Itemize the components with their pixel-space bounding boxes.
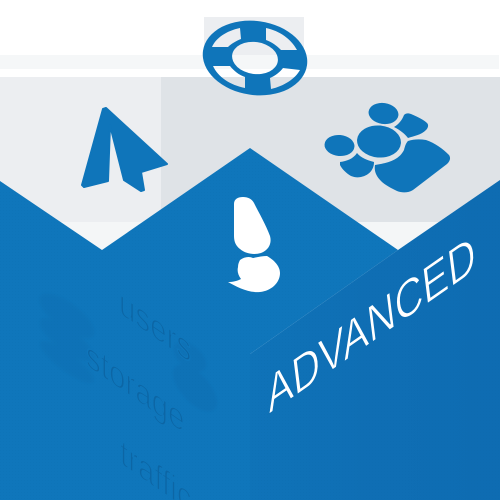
heading: ADVANCED: ADVANCED (263, 224, 479, 425)
faint icon: database stack (33, 286, 101, 389)
cube: left and top faces (0, 148, 398, 500)
icon: lifebuoy (203, 21, 307, 95)
cube: right face (250, 180, 500, 500)
icon: paper plane (82, 108, 167, 191)
icon: white figure (228, 197, 280, 292)
background panels (0, 17, 500, 262)
icon: people group (324, 101, 450, 192)
faint label: storage: storage (86, 332, 184, 441)
faint label: users: users (119, 280, 191, 371)
texture (0, 148, 500, 500)
faint icon: users (165, 336, 225, 419)
